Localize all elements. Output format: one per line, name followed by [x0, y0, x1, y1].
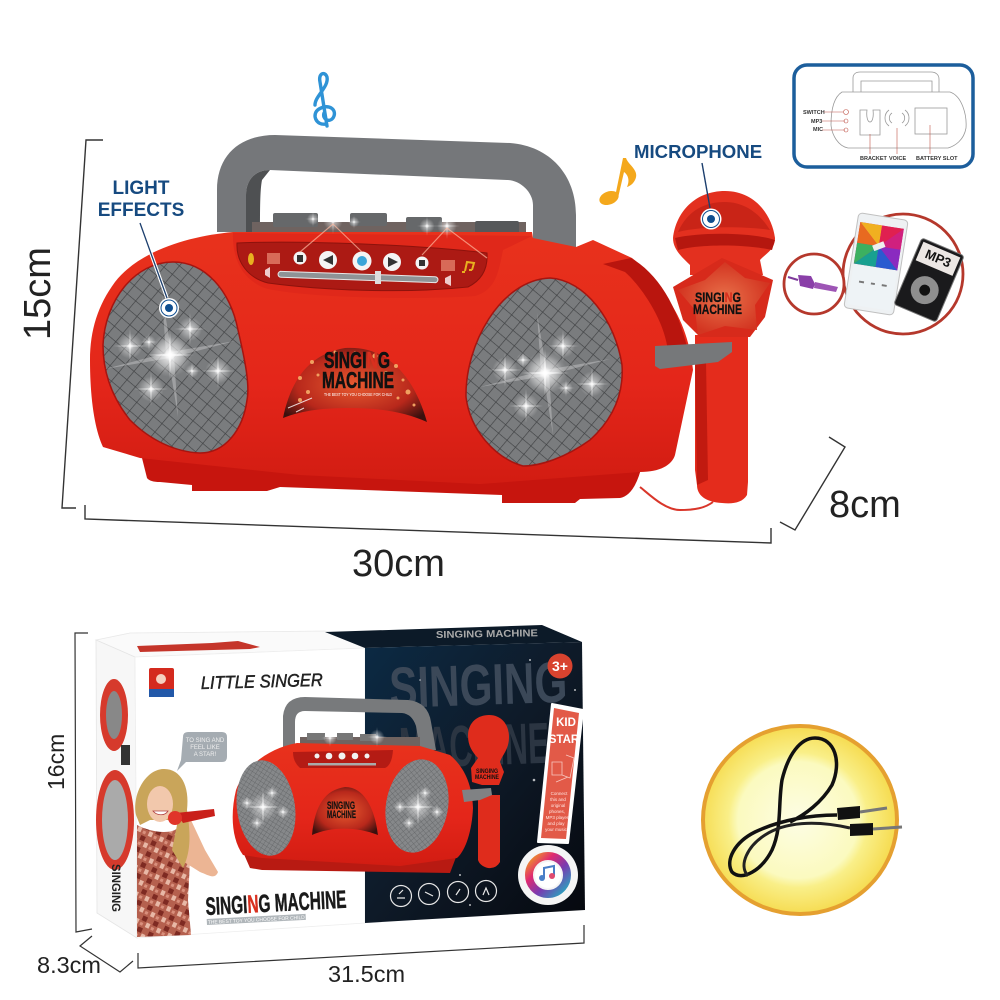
marker [702, 163, 710, 208]
kid star card: STAR [549, 734, 580, 746]
toy mic [478, 795, 500, 868]
girl singer [135, 769, 218, 937]
label: light effects: LIGHT [112, 178, 170, 199]
decal text: MACHINE [322, 367, 394, 393]
inset panel: back of toy [794, 65, 973, 167]
box toy image: SINGING [327, 800, 355, 812]
inset labels: SWITCH [803, 110, 825, 116]
inset labels: MP3 [811, 119, 822, 125]
label: 31.5cm: 31.5cm [328, 961, 405, 987]
toy base [243, 852, 458, 873]
decal speckles [298, 350, 416, 406]
decal text: SINGING [324, 347, 390, 373]
boombox handle [217, 135, 576, 250]
head [673, 191, 775, 275]
dimension: 16cm [43, 633, 92, 932]
dress [137, 825, 191, 937]
stars [419, 659, 576, 906]
callout marker: light effects [140, 223, 179, 318]
box toy image [231, 697, 509, 873]
toy handle [283, 697, 436, 750]
accessory: audio cable badge [703, 726, 902, 914]
yellow disc [703, 726, 897, 914]
kid star card: this and [550, 797, 566, 802]
speech bubble: FEEL LIKE [190, 745, 220, 751]
arm [178, 818, 218, 876]
toy decal [312, 787, 378, 835]
hand mic [176, 809, 215, 823]
toy speakers [231, 756, 301, 860]
speech bubble: A STAR! [194, 752, 217, 758]
product box [96, 625, 585, 938]
inset labels: MIC [813, 127, 823, 133]
microphone [640, 163, 775, 510]
box heading: LITTLE SINGER [201, 670, 323, 693]
label: 16cm: 16cm [43, 734, 69, 790]
inset labels: BATTERY SLOT [916, 156, 958, 162]
product name: SINGING MACHINE [205, 886, 347, 921]
kid star card: phones, [549, 809, 565, 814]
card pictogram [552, 755, 574, 782]
decal text [322, 347, 394, 393]
top base and buttons [252, 213, 526, 235]
star badge [673, 258, 773, 337]
box toy image: MACHINE [327, 809, 356, 821]
feature icons [390, 880, 496, 906]
brand logo [149, 668, 174, 697]
flap print [137, 641, 260, 652]
box toy image: SINGING [476, 768, 498, 775]
label: 8cm: 8cm [829, 484, 901, 526]
rainbow music icon [518, 845, 578, 905]
center decal [283, 347, 427, 422]
dimension: 8cm depth [780, 437, 901, 530]
inset labels: BRACKET [860, 156, 888, 162]
star text: MACHINE [693, 301, 742, 317]
label: 30cm: 30cm [352, 543, 445, 585]
control panel [233, 233, 532, 298]
large red circle [843, 214, 963, 334]
label: light effects [98, 178, 184, 221]
kid star card [538, 704, 583, 843]
icon: blue treble clef [315, 74, 334, 126]
holder [655, 342, 732, 369]
right shoulder recess [603, 258, 690, 360]
box left side [96, 640, 137, 938]
label: light effects: EFFECTS [98, 200, 184, 221]
sparkles right [480, 313, 610, 435]
dimension: 15cm height [17, 140, 103, 508]
icon: orange music note [597, 158, 636, 208]
line art [831, 72, 966, 148]
kid star card: KID [556, 717, 576, 729]
boombox base [140, 450, 642, 503]
tagline: THE BEST TOY YOU CHOOSE FOR CHILD [208, 915, 305, 926]
top panel lights [300, 208, 487, 258]
box dark top [325, 625, 582, 648]
audio connection illustration [784, 213, 964, 334]
side print [96, 679, 134, 912]
kid star card: and play [547, 821, 565, 826]
speech bubble: TO SING AND [186, 738, 225, 744]
star text: SINGING [695, 289, 741, 305]
small red circle with plug [784, 254, 844, 314]
box top flap [96, 631, 365, 657]
label: 8.3cm: 8.3cm [37, 952, 101, 978]
smartphone [844, 213, 908, 315]
cord [640, 487, 713, 510]
box dark panel [365, 642, 585, 923]
cable loop [730, 738, 837, 876]
toy body [233, 743, 473, 866]
faded title: SINGING [388, 650, 568, 721]
mp3 player: MP3 [923, 246, 953, 270]
product box: SINGING MACHINE [436, 628, 538, 641]
kid star card: your music [545, 827, 568, 832]
toy panel [293, 750, 393, 768]
box toy image: MACHINE [475, 774, 500, 781]
dimension: 8.3cm [37, 936, 133, 978]
kid star card: original [551, 803, 565, 808]
sparkles left [105, 295, 235, 417]
right speaker [466, 278, 622, 466]
mp3 player [894, 238, 964, 322]
kid star card: MP3 player [546, 815, 569, 820]
label: microphone: MICROPHONE [634, 141, 762, 162]
purple audio plug [788, 275, 838, 292]
jack plugs [837, 806, 902, 836]
label: 15cm: 15cm [17, 247, 59, 340]
hair [135, 769, 190, 868]
dimension: 31.5cm [138, 925, 584, 987]
toy sparkles [244, 788, 282, 826]
dimension: 30cm width [85, 505, 771, 585]
age badge [548, 654, 572, 678]
star text [693, 289, 742, 317]
kid star card: Connect [551, 791, 568, 796]
product box: MACHINE [398, 711, 550, 781]
boombox product [90, 135, 693, 503]
speech bubble [177, 732, 227, 771]
box front white [135, 648, 365, 938]
leader lines [822, 110, 930, 154]
handle [695, 335, 748, 503]
boombox body [90, 232, 693, 484]
center decal: THE BEST TOY YOU CHOOSE FOR CHILD [324, 392, 393, 397]
inset labels [803, 110, 958, 162]
inset labels: VOICE [889, 156, 906, 162]
face [147, 786, 173, 822]
rainbow wedges [854, 222, 904, 270]
left speaker [103, 262, 248, 453]
age badge: 3+ [552, 658, 568, 674]
side print: SINGING [109, 864, 123, 912]
